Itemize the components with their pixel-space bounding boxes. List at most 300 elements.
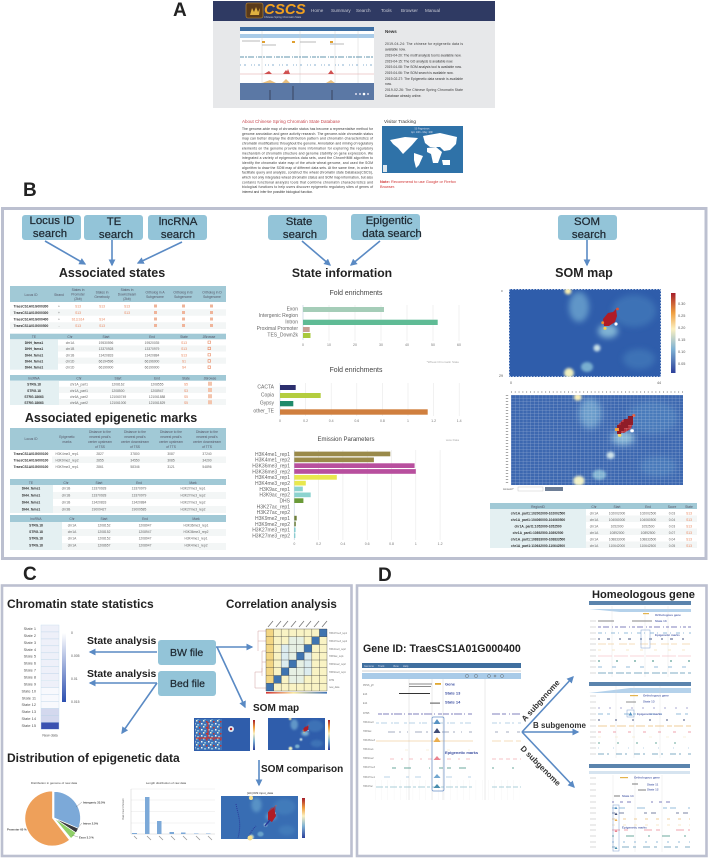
box: Bed file [158,671,216,696]
state heat map: State 14 [22,716,37,721]
visitor tracking map [382,119,463,173]
label: State analysis (Bed): State analysis [87,669,157,680]
heading: State information: State information [292,266,392,280]
table: lncRNA states: S5 [184,401,188,405]
arrow to SOM map [586,240,588,265]
about text block: interest and infer the possible biological function. [242,190,313,194]
table: TE states: DHH_fams1 [25,353,43,357]
panel D: homeologous gene comparison [357,565,706,856]
table: locus states: + [58,311,60,315]
table: SOM regions: chr1A [590,531,599,535]
chart: fold enrichments TE families: 0.8 [380,419,385,423]
table: locus states: Downstream [118,292,137,296]
table: lncRNA states: 1208555 [151,382,164,386]
search box: TE: search [99,229,133,241]
table: TE states: 19520035 [145,341,159,345]
table: TE epigenetic marks: Mark [189,481,197,485]
table: locus states: S13 [124,311,130,315]
pie chart: genome distribution: Intron 2.5% [83,822,99,826]
state heat map: State 13 [22,709,36,714]
news list: 2019-04-15: The GO analysis is available now. [385,60,453,64]
table: SOM regions: chr1A [590,524,599,528]
mini SOM: noisy raw data [194,718,255,751]
table: locus states: - [58,324,60,328]
table: locus states: Subgenome [174,295,192,299]
panel C: online analysis [2,564,352,856]
table: lncRNA epigenetic marks: 1208152 [98,524,111,528]
letter A: A [173,0,187,21]
chart: emission parameters: Emission Parameters [317,437,375,443]
state heat map: State 15 [22,723,36,728]
table: lncRNA states: Start [115,376,122,380]
chart: emission parameters: H3K4me1_rep2 [255,458,290,464]
main genome browser: H3K36me3 [363,739,376,742]
table: lncRNA states: chr1A_part1 [70,389,88,393]
correlation heat map: new_data [329,686,340,689]
chart: fold enrichments TE families: Gypsy [260,400,274,406]
chart: emission parameters: 0.2 [316,542,321,546]
chart: emission parameters: H3K9me2_rep2 [255,522,290,528]
chart: emission parameters: 1.2 [438,542,443,546]
table: TE states: S1 [182,360,186,364]
table: SOM regions: End [645,505,651,509]
table: lncRNA epigenetic marks: H3K36me3_rep2 [184,530,209,534]
track annotations [399,682,479,755]
main genome browser: Genome [364,664,375,668]
browser note: Note: Recommend to use Google or Firefox [380,179,456,184]
table: lncRNA epigenetic marks: Start [101,517,108,521]
table: locus epigenetic marks: 2827 [96,452,104,456]
table: lncRNA epigenetic marks: chr1A [68,544,77,548]
table: lncRNA epigenetic marks: H3K4me1_rep1 [184,536,208,540]
table: locus states: + [58,304,60,308]
arrows to state information [302,241,380,265]
table: locus epigenetic marks: 58346 [130,465,140,469]
table: TE epigenetic marks: 13420833 [92,500,106,504]
search box: TE [84,215,143,241]
SOM hexagon map: 0 [501,289,503,293]
table: locus epigenetic marks: Epigenetic [59,435,75,439]
about text block: which not only integrates wheat chromatin status and SOM map information, but also [242,176,373,180]
table: TE epigenetic marks [10,479,226,513]
website navigation bar: Summary [331,8,351,13]
chart: fold enrichments TE families: CACTA [257,384,275,390]
heading: Correlation analysis: Correlation analysis [226,598,337,611]
table: locus epigenetic marks: Distance to the [160,430,182,434]
about text block: facilitate query and analysis, construct the wheat chromatin state Database(CSCS), [242,171,373,175]
SOM colour bar: 0.20 [678,326,685,330]
D subgenome browser: State 12 [647,788,659,792]
search box: Epigenetic data [351,214,422,240]
pie chart: genome distribution [7,781,106,846]
table: locus states: Ortholog in B [173,290,193,294]
chart: emission parameters: wow Data [446,438,459,442]
website navigation bar [213,1,495,21]
table: TE states: DHH_fams1 [25,360,43,364]
table: locus epigenetic marks: nearest peak's [160,435,182,439]
heading: Chromatin state statistics: Chromatin state statistics [7,597,154,611]
B subgenome browser: State 13 [643,700,655,704]
table: locus states: TraesCS1A01G000300 [14,304,48,308]
table: TE epigenetic marks: DHH_fams1 [22,486,40,490]
table: locus epigenetic marks: of TTS [166,445,177,449]
table: SOM regions: 104060000 [609,518,625,522]
state heat map: State 3 [24,640,36,645]
search box: SOM: search [572,229,606,241]
table: lncRNA epigenetic marks: 1208947 [139,524,152,528]
table: lncRNA epigenetic marks: End [142,517,148,521]
table: lncRNA epigenetic marks: chr1A [68,524,77,528]
chart: fold enrichments genomic regions: Proximal Promoter [257,326,298,332]
state heat map: State 11 [22,696,36,700]
search box: State [268,215,327,241]
table: lncRNA epigenetic marks: H3K4me1_rep2 [184,544,208,548]
table: locus epigenetic marks: 3085 [167,458,175,462]
panel D border [357,586,706,856]
table: SOM regions: chr1A [590,538,599,542]
table: SOM regions: chr1A_part1:110642000-110642500 [511,544,565,548]
table: locus states: S13,S14 [72,318,84,322]
table: lncRNA states: S5 [184,395,188,399]
news list: 2019-02-26: The Chinese Spring Chromatin State [385,88,463,92]
table: TE states: 66196000 [145,360,159,364]
table: lncRNA states: 1208162 [112,382,125,386]
main genome browser: H3K27me3 [363,766,376,769]
news list: 2019-04-24: The chinese for epigenetic data is [385,42,463,46]
heading: Associated states: Associated states [59,266,165,280]
news list: 2019-04-08: The SOM analysis tool is available now. [385,65,462,69]
SOM hexagon map: 0 [510,381,512,385]
table: locus epigenetic marks: Locus ID [24,437,38,441]
chart: fold enrichments genomic regions: Intergenic Region [259,313,298,319]
chart: fold enrichments TE families: other_TE [253,408,275,414]
about text block: map can better display the distribution pattern and chromatin characteristics of [242,137,373,141]
state colour bar: 0.015 [71,700,80,704]
chart: emission parameters: 0.8 [389,542,394,546]
table: lncRNA states: STRG.18663 [24,401,44,405]
heading: SOM map: SOM map [555,266,613,280]
table: SOM regions: chr1A [590,544,599,548]
SOM colour bar: 0.30 [678,302,685,306]
table: lncRNA epigenetic marks: STRG.18 [29,544,43,548]
chart: emission parameters: 0.4 [340,542,345,546]
chart: fold enrichments genomic regions: 0 [302,343,304,347]
search box: lncRNA: lncRNA [159,216,198,228]
bar chart: length distribution: Length distribution of raw data [146,781,186,785]
chart: emission parameters: H3K36me3_rep2 [252,469,290,475]
table: SOM regions: 110642000 [609,544,625,548]
table: TE epigenetic marks: 19009427 [92,508,106,512]
track annotations: State 14 [445,700,461,704]
news list: 2019-02-27: The Epigenetic data search is available [385,77,463,81]
table: SOM regions: 108833000 [609,538,625,542]
table: locus epigenetic marks: 34200 [202,458,212,462]
table: SOM regions: Score [668,505,676,509]
main genome browser [362,663,521,800]
table: SOM regions: S13 [686,538,692,542]
table: lncRNA states: S5 [184,382,188,386]
panel B border [2,208,706,558]
table: locus epigenetic marks: H3K9me2_rep2 [55,458,79,462]
chart: fold enrichments genomic regions [257,290,461,364]
table: lncRNA epigenetic marks: H3K36me3_rep1 [184,524,209,528]
table: SOM regions: S13 [686,544,692,548]
table: SOM regions: chr1A_part1:10892500-10892500 [513,531,564,535]
table: locus states: Strand [54,293,64,297]
table: locus epigenetic marks: center upstream [159,440,183,444]
table: locus epigenetic marks: H3K9me3_rep1 [55,465,79,469]
table: TE epigenetic marks: 13420884 [132,500,146,504]
genome browser carousel [240,27,374,100]
table: SOM regions: 0.07 [669,531,675,535]
box: Bed file: Bed file [170,678,205,690]
heading: Homeologous gene: Homeologous gene [592,589,695,601]
table: TE epigenetic marks: 13370979 [132,486,146,490]
D subgenome browser: Epigenetic marks [622,826,647,830]
table: locus epigenetic marks: 2861 [96,465,104,469]
table: locus epigenetic marks: 3121 [167,465,175,469]
table: SOM regions: 102002000 [609,512,625,516]
SOM colour bar: 0.10 [678,350,685,354]
chart: fold enrichments genomic regions: 20 [353,343,357,347]
correlation heat map: H3K9me3_rep1 [329,671,346,674]
website navigation bar: Home [311,8,324,13]
table: lncRNA epigenetic marks: 1208947 [139,544,152,548]
table: TE epigenetic marks: 13370928 [92,486,106,490]
table: locus states: Ortholog in A [145,290,165,294]
arrows to subgenomes [522,677,578,787]
table: lncRNA epigenetic marks: 1208947 [139,536,152,540]
arrow to SOM comparison [258,760,260,785]
table: locus states: Ortholog in D [202,290,222,294]
about text block: biological functions to help users discover epigenetic regulatory sites of genes of [242,185,373,189]
search box: SOM [558,215,617,241]
about text block: integrated a variety of epigenomics data sets, used the ChromHMM algorithm to [242,156,373,160]
pie chart: genome distribution: Intergenic 33.5% [83,800,106,804]
main genome browser: H3K27me1 [363,776,376,779]
arrows from file boxes [90,647,252,733]
search box: Locus ID [22,215,81,240]
table: TE states: TE [32,335,37,339]
arrows to associated states [45,240,182,265]
table: locus epigenetic marks: nearest peak's [89,435,111,439]
table: locus epigenetic marks: center downstream [193,440,221,444]
search box: lncRNA [148,215,207,241]
table: lncRNA states: End [154,376,160,380]
news list: Database already online. [385,94,422,98]
D subgenome browser: Orthologous gene [634,776,660,780]
website navigation bar: Manual [425,8,440,13]
table: lncRNA epigenetic marks: STRG.18 [29,536,43,540]
about text block: identify the chromatin state map of the whole wheat genome, and used the SOM [242,161,373,165]
table: SOM regions: 110642500 [640,544,656,548]
table: locus states: S13 [75,311,81,315]
table: lncRNA epigenetic marks: STRG.18 [29,524,43,528]
chart: fold enrichments TE families [253,367,462,423]
label: A subgenome: A subgenome [520,678,562,723]
table: TE epigenetic marks: H3K27me3_rep1 [181,486,206,490]
main genome browser: E13 [363,693,368,696]
SOM colour bar [671,293,685,373]
SOM hexagon map: 44 [657,381,661,385]
state colour bar: 0 [71,631,73,635]
table: lncRNA states: 121061829 [149,401,165,405]
search box: Locus ID: search [33,228,67,240]
letter C: C [23,564,37,585]
website navigation bar: Chinese Spring Chromatin State [264,15,302,19]
table: lncRNA states: chr6A_part2 [70,395,88,399]
table: TE epigenetic marks: chr3B [62,508,71,512]
table: locus states: + [58,318,60,322]
table: locus epigenetic marks: of TTS [202,445,213,449]
search box: State: search [283,229,317,241]
B subgenome browser: Orthologous gene [643,694,669,698]
chart: fold enrichments TE families: 1.4 [457,419,462,423]
track annotations: Epigenetic marks [445,750,479,755]
table: lncRNA epigenetic marks: 1208657 [98,544,111,548]
table: SOM regions: 0.04 [669,518,675,522]
A subgenome browser: State 13 [655,619,667,623]
table: SOM regions: S13 [686,531,692,535]
D subgenome browser: State 11 [647,782,659,786]
chart: emission parameters: H3K4me1_rep1 [255,452,290,458]
about text block: About Chinese Spring Chromatin State Database [242,119,341,124]
table: TE states: chr1A [66,341,75,345]
about text block: algorithm to draw the SOM map of different data sets. At the same time, in order to [242,166,373,170]
correlation heat map: H3K9ac_rep1 [329,655,344,658]
table: SOM regions: S13 [686,512,692,516]
table: locus states: (2kb) [74,297,82,301]
state heat map: State 5 [24,654,36,658]
table: lncRNA states: 121060749 [110,395,126,399]
table: lncRNA epigenetic marks: STRG.18 [29,530,43,534]
search box: TE: TE [107,216,122,228]
table: TE epigenetic marks: TE [29,481,34,485]
table: locus states: States in [72,288,85,292]
label: State analysis (BW): State analysis [87,636,157,647]
table: TE states: chr1D [66,366,75,370]
table: lncRNA states: STRG.18663 [24,395,44,399]
table: locus epigenetic marks: H3K4me3_rep1 [55,452,79,456]
correlation heat map: H3K27me3_rep1 [329,632,348,635]
table: locus epigenetic marks: nearest peak's [124,435,146,439]
table: locus epigenetic marks: of TSS [130,445,141,449]
chart: fold enrichments genomic regions: 40 [405,343,409,347]
table: TE epigenetic marks: H3K27me3_rep2 [181,500,206,504]
table: lncRNA epigenetic marks: 1208152 [98,530,111,534]
pie chart: genome distribution: Distribution in genome of new data [31,781,77,785]
chart: emission parameters: 0 [293,542,295,546]
table: locus states: TraesCS1A01G000500 [14,324,48,328]
website navigation bar: CSCS [264,1,306,18]
letter B: B [23,180,37,201]
table: locus epigenetic marks: nearest peak's [196,435,218,439]
table: locus epigenetic marks: Distance to the [124,430,146,434]
chart: fold enrichments genomic regions: Fold enrichments [330,290,383,297]
box: BW file [158,640,216,665]
main genome browser: H3K27ac [363,785,374,788]
chart: emission parameters: H3K9ac_rep2 [259,493,290,499]
bar chart: length distribution: Peak Count Percent [122,798,125,820]
table: locus states: S13 [99,304,105,308]
table: SOM regions: 10892000 [610,531,624,535]
table: locus epigenetic marks: TraesCS1A01G000100 [14,458,48,462]
chart: fold enrichments TE families: Fold enrichments [330,367,383,374]
state heat map: State 6 [24,660,36,666]
website navigation bar: Browser [401,8,418,13]
search box: Epigenetic data: Epigentic [366,215,413,227]
news list: available now. [385,48,406,52]
state heat map: State 8 [24,674,36,680]
state colour bar: 0.005 [71,654,80,658]
table: SOM regions: 1052000 [611,524,624,528]
news list: 2019-04-06: The SOM search is available now. [385,71,454,75]
table: lncRNA states: State [182,376,190,380]
state heat map: State 12 [22,702,36,707]
table: lncRNA states: STRG.18 [27,382,41,386]
table: TE epigenetic marks: Start [96,481,103,485]
main genome browser: H3K4me3 [363,721,374,724]
heading: Distribution of epigenetic data: Distribution of epigenetic data [7,751,180,765]
chart: fold enrichments TE families: 0.4 [329,419,334,423]
correlation heat map: H3K9me2_rep2 [329,663,346,666]
table: TE epigenetic marks: chr1B [62,494,71,498]
table: locus epigenetic marks: center upstream [88,440,112,444]
chart: fold enrichments genomic regions: Exon [287,306,298,312]
table: TE states: Start [103,335,110,339]
table: SOM regions: 108833500 [640,538,656,542]
table: SOM regions: 104060500 [640,518,656,522]
table: SOM regions: chr1A_part1:102002000-102002500 [511,512,565,516]
table: TE epigenetic marks: chr1B [62,500,71,504]
table: TE states: S4 [182,366,186,370]
table: TE epigenetic marks: chr1B [62,486,71,490]
state heat map: State 4 [24,647,37,652]
table: SOM regions: 10892500 [641,531,655,535]
chart: fold enrichments genomic regions: 60 [457,343,461,347]
about text block: mechanism of chromatin structure and genome stability on gene expression. We [242,151,373,155]
table: lncRNA epigenetic marks: Chr [69,517,76,521]
SOM hexagon map: 29 [499,374,503,378]
chart: emission parameters: H3K9me2_rep1 [255,516,290,522]
table: lncRNA epigenetic marks: chr1A [68,530,77,534]
chart: emission parameters: H3K27ac_rep1 [257,504,290,510]
SOM colour bar: 0.15 [678,338,685,342]
heading: Associated epigenetic marks: Associated epigenetic marks [25,411,197,425]
D subgenome browser: State 14 [622,794,634,798]
table: lncRNA epigenetic marks: lncRNA [30,517,42,521]
chart: emission parameters: H3K4me3_rep1 [255,475,290,481]
heading: Gene ID: Gene ID: TraesCS1A01G000400 [363,643,521,655]
pie chart: genome distribution: Exon 3.3 % [79,836,94,840]
table: locus states: States in [96,290,109,294]
state heat map: State 7 [24,668,36,672]
state heat map: State 9 [24,682,36,686]
SOM colour bar: 0.05 [678,362,685,366]
table: SOM regions [490,503,697,548]
table: locus epigenetic marks [10,428,226,469]
correlation heat map: H3K4me3_rep2 [329,648,346,651]
table: locus epigenetic marks: 3087 [167,452,175,456]
table: TE states: DHH_fams1 [25,366,43,370]
chart: fold enrichments genomic regions: 10 [327,343,331,347]
letter D: D [378,565,392,586]
gray hero band [213,21,495,108]
table: TE epigenetic marks: End [136,481,142,485]
table: SOM regions: Start [614,505,621,509]
main genome browser: Help [403,664,409,668]
epigenetic marks highlight [432,717,444,791]
